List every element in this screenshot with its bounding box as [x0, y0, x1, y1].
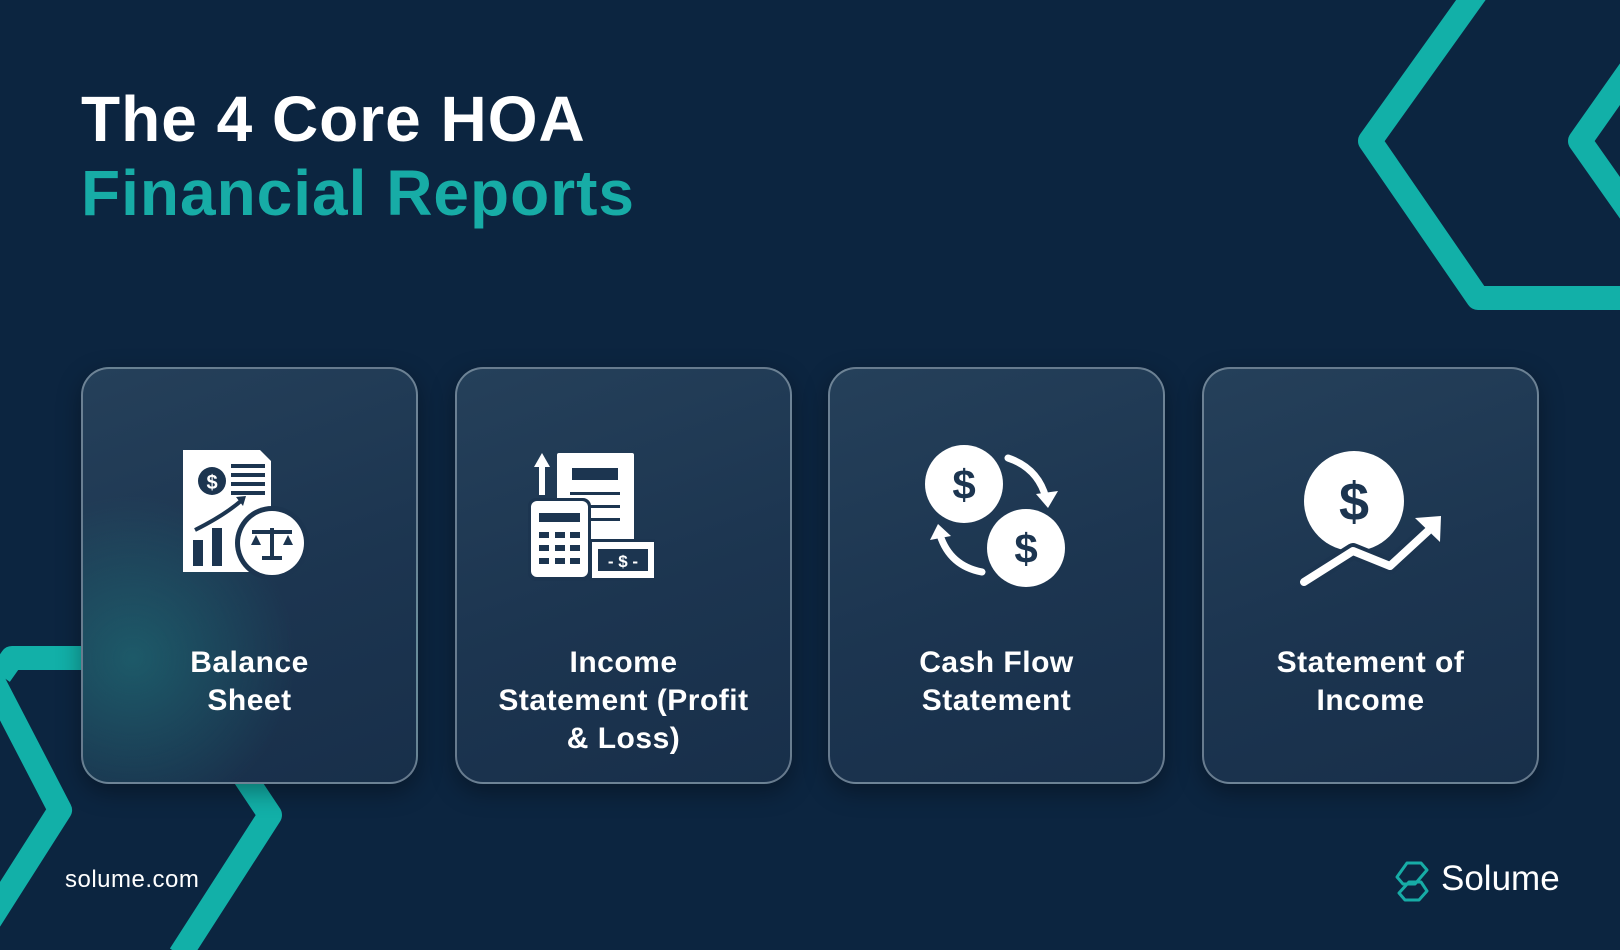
panel: income statement: [455, 367, 792, 784]
title: Financial Reports: [81, 157, 635, 229]
icon: cash flow: [925, 445, 1065, 587]
title: [81, 83, 635, 229]
panel: statement of income: Statement of: [1277, 646, 1464, 679]
icon: logo mark: [1396, 862, 1428, 902]
panel: balance sheet: Balance: [190, 646, 309, 679]
panel: balance sheet: Sheet: [207, 684, 292, 717]
panel: income statement: & Loss): [567, 722, 680, 755]
icon: income statement: [531, 453, 654, 578]
icon: cash flow: $: [952, 461, 976, 508]
title: The 4 Core HOA: [81, 83, 586, 155]
icon: income statement: - $ -: [608, 552, 638, 571]
icon: balance sheet: [183, 450, 304, 575]
panel: statement of income: [1202, 367, 1539, 784]
logo: Solume: [1396, 859, 1560, 902]
icon: balance sheet: $: [206, 472, 218, 494]
panel: balance sheet: [81, 367, 418, 784]
icon: statement of income: [1300, 451, 1441, 586]
icon: cash flow: $: [1014, 525, 1038, 572]
icon: statement of income: $: [1339, 472, 1369, 532]
panel: income statement: Statement (Profit: [498, 684, 749, 717]
footer: website: solume.com: [65, 866, 199, 893]
panel: cash flow: [828, 367, 1165, 784]
logo: Solume: Solume: [1441, 859, 1560, 898]
panel: cash flow: Cash Flow: [919, 646, 1074, 679]
panel: cash flow: Statement: [922, 684, 1071, 717]
panel: statement of income: Income: [1316, 684, 1425, 717]
panel: income statement: Income: [569, 646, 678, 679]
